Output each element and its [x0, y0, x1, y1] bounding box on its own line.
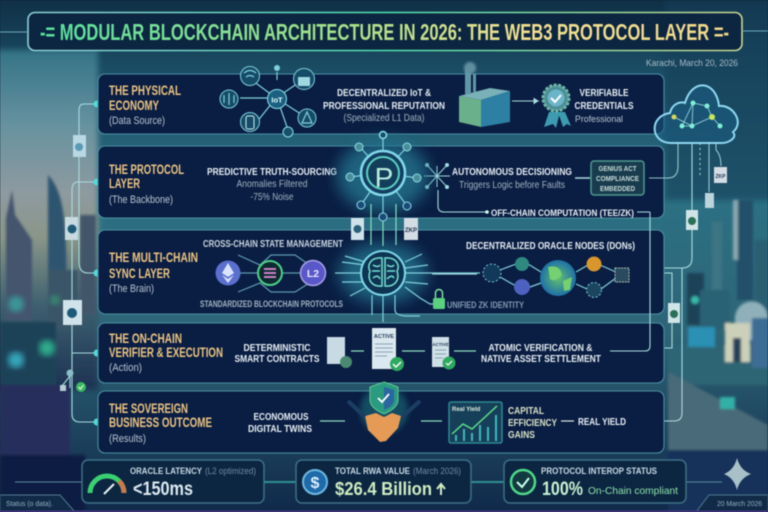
- right connector rail: [634, 143, 692, 421]
- text: DONs: DECENTRALIZED ORACLE NODES (DONs): [466, 240, 635, 252]
- icon: container: [459, 62, 510, 127]
- arrows: [351, 350, 476, 352]
- text: capital efficiency: CAPITAL: [508, 405, 544, 417]
- stat: interop: 100%: [542, 479, 583, 500]
- stat: total rwa: TOTAL RWA VALUE: [335, 466, 410, 477]
- stat: total rwa: $26.4 Billion: [335, 478, 432, 499]
- text: capital efficiency: EFFICIENCY: [508, 417, 557, 429]
- off-chain computation: OFF-CHAIN COMPUTATION (TEE/ZK): [491, 208, 634, 219]
- text: atomic verification: ATOMIC VERIFICATION &: [488, 342, 593, 354]
- text: digital twins: [248, 411, 312, 435]
- icon: p file: [686, 210, 698, 230]
- icon: p file right: [668, 303, 680, 323]
- heading line: ECONOMY: [109, 98, 159, 113]
- off-chain computation: [438, 190, 650, 219]
- stat: total rwa: [296, 460, 471, 503]
- text: capital efficiency: GAINS: [508, 429, 535, 441]
- text: unified zk identity: UNIFIED ZK IDENTITY: [447, 300, 525, 311]
- sublabel: (The Backbone): [109, 194, 173, 206]
- icon: left file 3: [63, 300, 82, 325]
- stat: total rwa: (March 2026): [413, 466, 461, 476]
- text: cross-chain: CROSS-CHAIN STATE MANAGEMENT: [203, 239, 343, 250]
- icon: zkp file: [714, 167, 727, 183]
- heading line: LAYER: [109, 176, 140, 191]
- text: real yield: REAL YIELD: [578, 416, 626, 428]
- arrows: protocol to brain: [371, 204, 396, 246]
- text: autonomous decisioning: Triggers Logic before Faults: [459, 179, 565, 191]
- text: atomic verification: [481, 342, 601, 365]
- text: deterministic: [234, 342, 320, 365]
- panel: sovereign outcome: [98, 382, 664, 453]
- connector: [264, 481, 504, 483]
- arrow: [561, 420, 574, 422]
- text: verifiable credentials: CREDENTIALS: [574, 100, 634, 112]
- panel: multi-chain sync: [98, 230, 664, 314]
- text: verifiable credentials: Professional: [575, 114, 623, 125]
- stat: interop: PROTOCOL INTEROP STATUS: [541, 466, 657, 477]
- compliance box: COMPLIANCE: [596, 176, 639, 183]
- title banner: [0, 12, 768, 50]
- heading line: VERIFIER & EXECUTION: [109, 345, 223, 360]
- text: deterministic: DETERMINISTIC: [244, 342, 311, 354]
- text: capital efficiency: [508, 405, 557, 441]
- text: deterministic: SMART CONTRACTS: [234, 353, 320, 365]
- icon: zkp document: [404, 218, 418, 240]
- icon: active contracts: ACTIVE: [432, 342, 449, 347]
- left connector rail: [72, 100, 100, 426]
- icon: verifiable badge: [543, 85, 571, 128]
- icon: left file 1: [73, 135, 86, 157]
- text: verifiable credentials: VERIFIABLE: [580, 87, 628, 99]
- text: digital twins: ECONOMOUS: [254, 411, 308, 423]
- text: decentralized IoT: PROFESSIONAL REPUTATION: [323, 100, 445, 112]
- icon: zkp file: ZKP: [716, 174, 726, 180]
- icon: active contracts: ACTIVE: [374, 334, 394, 340]
- panel: on-chain verifier: [98, 212, 664, 383]
- icon: chain network: L2: [307, 268, 319, 280]
- right skyline: [668, 200, 768, 512]
- dateline: Karachi, March 20, 2026: [646, 58, 738, 69]
- heading: THE SOVEREIGN: [109, 401, 188, 416]
- icon: IoT network: [220, 65, 316, 137]
- line from off-chain: [610, 212, 650, 351]
- text: standardized protocols: STANDARDIZED BLOCKCHAIN PROTOCOLS: [200, 299, 343, 309]
- compliance box: GENIUS ACT: [598, 166, 637, 173]
- arrow: [320, 420, 442, 422]
- heading line: BUSINESS OUTCOME: [109, 415, 212, 430]
- stat: oracle latency: [82, 460, 264, 503]
- icon: protocol hub: [346, 132, 421, 221]
- stat: oracle latency: ORACLE LATENCY: [130, 466, 203, 477]
- text: autonomous decisioning: [452, 166, 572, 191]
- icon: left node check: [60, 370, 86, 392]
- icon: lock: [433, 290, 445, 309]
- status tab right: 20 March 2026: [717, 499, 762, 508]
- sublabel: (Action): [109, 362, 142, 374]
- icon: oracle globe network: [483, 256, 629, 298]
- icon: real yield chart: Real Yield: [452, 407, 481, 413]
- stat: oracle latency: (L2 optimized): [205, 466, 256, 476]
- stat: total rwa: $: [311, 475, 320, 492]
- arrow: [575, 177, 590, 179]
- status tab left: [0, 495, 75, 512]
- icon: brain hub: [335, 251, 480, 322]
- text: decentralized IoT: (Specialized L1 Data): [344, 112, 424, 124]
- icon: left file 2: [65, 217, 78, 240]
- icon: protocol hub: P: [375, 162, 393, 193]
- compliance box: EMBEDDED: [600, 186, 635, 193]
- text: autonomous decisioning: AUTONOMOUS DECISIONING: [452, 166, 572, 178]
- text: decentralized IoT: DECENTRALIZED IoT &: [337, 87, 431, 99]
- text: decentralized IoT: [323, 87, 445, 124]
- heading: THE PROTOCOL: [109, 162, 184, 177]
- icon: cloud: [655, 85, 738, 143]
- icon: handshake shield: [348, 382, 420, 442]
- arrow: [432, 273, 477, 275]
- decorative star: [724, 458, 751, 490]
- text: atomic verification: NATIVE ASSET SETTLEMENT: [481, 353, 601, 365]
- cloud downlinks: [649, 143, 721, 192]
- text: predictive truth sourcing: Anomalies Filtered: [236, 178, 308, 190]
- text: predictive truth sourcing: -75% Noise: [250, 191, 294, 203]
- panel: protocol layer: [98, 146, 664, 219]
- icon: document: [351, 218, 364, 240]
- icon: zkp document: ZKP: [405, 228, 417, 234]
- text: predictive truth sourcing: [207, 166, 337, 203]
- stat: oracle latency: <150ms: [133, 479, 193, 500]
- compliance box: [591, 161, 644, 195]
- heading: physical economy: THE PHYSICAL: [109, 83, 181, 98]
- stat: interop: On-Chain compliant: [588, 485, 678, 497]
- dotted downlink: [699, 143, 701, 177]
- sublabel: (The Brain): [109, 283, 154, 295]
- left skyline: [0, 175, 96, 512]
- icon: chain network: [216, 255, 326, 292]
- text: predictive truth sourcing: PREDICTIVE TRUTH-SOURCING: [207, 166, 337, 178]
- sublabel: (Data Source): [109, 115, 165, 127]
- icon: file: [705, 193, 714, 208]
- text: verifiable credentials: [574, 87, 634, 125]
- icon: active contracts: [327, 328, 456, 371]
- stat: interop: [504, 460, 686, 503]
- panel: physical economy: [98, 62, 664, 137]
- central hub glow: [337, 140, 429, 303]
- arrow: [512, 98, 538, 104]
- bottom side lines: [15, 481, 722, 483]
- heading line: SYNC LAYER: [109, 266, 170, 281]
- text: digital twins: DIGITAL TWINS: [248, 423, 312, 435]
- status tab right: [696, 495, 768, 512]
- icon: IoT network: IoT: [271, 96, 283, 104]
- icon: node star: [424, 164, 450, 188]
- sublabel: (Results): [109, 433, 146, 445]
- icon: real yield chart: [449, 402, 502, 443]
- bottom edge: [0, 510, 768, 512]
- heading: THE ON-CHAIN: [109, 331, 182, 346]
- status tab left: Status (o data).: [6, 499, 53, 508]
- heading: THE MULTI-CHAIN: [109, 250, 198, 265]
